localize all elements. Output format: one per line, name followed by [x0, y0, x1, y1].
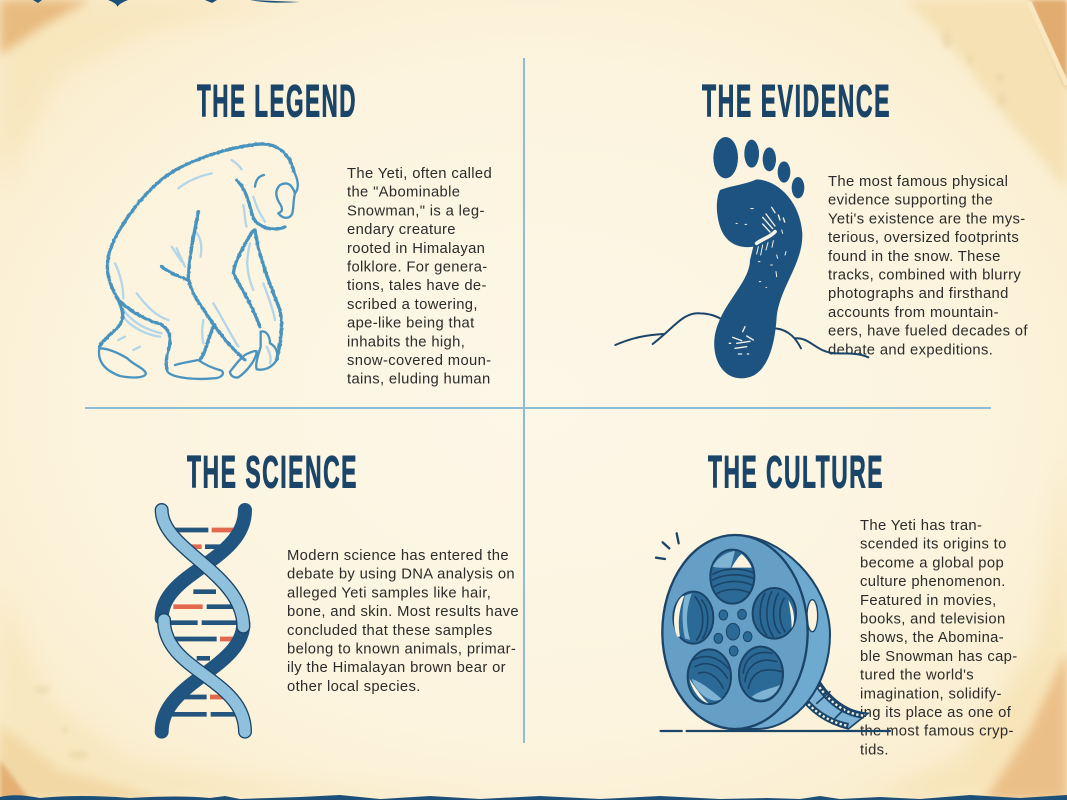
- quadrant divider lines: [85, 58, 991, 743]
- text block: the evidence: Yeti's existence are the mys-: [828, 211, 1025, 227]
- text block: the science: ily the Himalayan brown bear or: [287, 660, 506, 676]
- text block: the culture: Featured in movies,: [860, 593, 997, 609]
- film strip: [797, 662, 868, 729]
- text block: the evidence: accounts from mountain-: [828, 305, 999, 321]
- torn blue edge: top: [33, 0, 300, 7]
- text block: the evidence: eers, have fueled decades of: [828, 324, 1028, 340]
- text block: the legend: Snowman," is a leg-: [347, 203, 485, 219]
- text block: the legend: inhabits the high,: [347, 334, 465, 350]
- text block: the culture: the most famous cryp-: [860, 724, 1014, 740]
- heading: the science: THE SCIENCE: [187, 446, 358, 498]
- text block: the evidence: terious, oversized footprints: [828, 230, 1019, 246]
- text block: the legend: The Yeti, often called: [347, 166, 492, 182]
- text block: the science: other local species.: [287, 679, 421, 695]
- text block: the culture: become a global pop: [860, 555, 1004, 571]
- text block: the legend: endary creature: [347, 222, 456, 238]
- icon: dna helix: [162, 510, 245, 732]
- icon: yeti sketch: [99, 144, 298, 379]
- text block: the legend: snow-covered moun-: [347, 353, 491, 369]
- panel: the legend: THE LEGEND: [197, 76, 357, 126]
- panel: the legend: [99, 76, 497, 388]
- text block: the legend: folklore. For genera-: [347, 260, 488, 276]
- text block: the science: debate by using DNA analysis on: [287, 567, 515, 583]
- text block: the culture: books, and television: [860, 612, 1006, 628]
- text block: the culture: culture phenomenon.: [860, 574, 1006, 590]
- text block: the legend: tains, eluding human: [347, 372, 491, 388]
- text block: the legend: scribed a towering,: [347, 297, 478, 313]
- text block: the culture: The Yeti has tran-: [860, 518, 982, 534]
- text block: the science: concluded that these samples: [287, 623, 493, 639]
- heading: the evidence: THE EVIDENCE: [702, 76, 891, 126]
- text block: the evidence: found in the snow. These: [828, 249, 1001, 265]
- text block: the culture: shows, the Abomina-: [860, 630, 1004, 646]
- text block: the evidence: debate and expeditions.: [828, 342, 993, 358]
- text block: the culture: ing its place as one of: [860, 705, 1012, 721]
- panel: the culture: [656, 446, 1022, 758]
- icon: footprint: [615, 137, 868, 378]
- text block: the science: bone, and skin. Most results have: [287, 604, 519, 620]
- text block: the evidence: photographs and firsthand: [828, 286, 1009, 302]
- text block: the legend: tions, tales have de-: [347, 278, 487, 294]
- text block: the culture: tured the world's: [860, 668, 974, 684]
- text block: the culture: imagination, solidify-: [860, 686, 1002, 702]
- text block: the culture: scended its origins to: [860, 537, 1007, 553]
- text block: the evidence: tracks, combined with blurry: [828, 268, 1021, 284]
- text block: the culture: ble Snowman has cap-: [860, 649, 1018, 665]
- panel: the science: [162, 446, 523, 732]
- text block: the science: alleged Yeti samples like hair,: [287, 585, 491, 601]
- torn blue edge: bottom: [0, 795, 1067, 800]
- text block: the evidence: evidence supporting the: [828, 193, 993, 209]
- text block: the legend: the "Abominable: [347, 185, 460, 201]
- heading: the culture: THE CULTURE: [708, 446, 884, 498]
- text block: the science: Modern science has entered the: [287, 548, 509, 564]
- text block: the culture: tids.: [860, 742, 889, 758]
- text block: the legend: rooted in Himalayan: [347, 241, 485, 257]
- highlights inside the reel holes: [674, 551, 794, 703]
- text block: the science: belong to known animals, primar-: [287, 642, 516, 658]
- text block: the legend: ape-like being that: [347, 316, 475, 332]
- icon: film reel: [656, 533, 890, 731]
- text block: the evidence: The most famous physical: [828, 174, 1008, 190]
- panel: the evidence: [615, 76, 1032, 378]
